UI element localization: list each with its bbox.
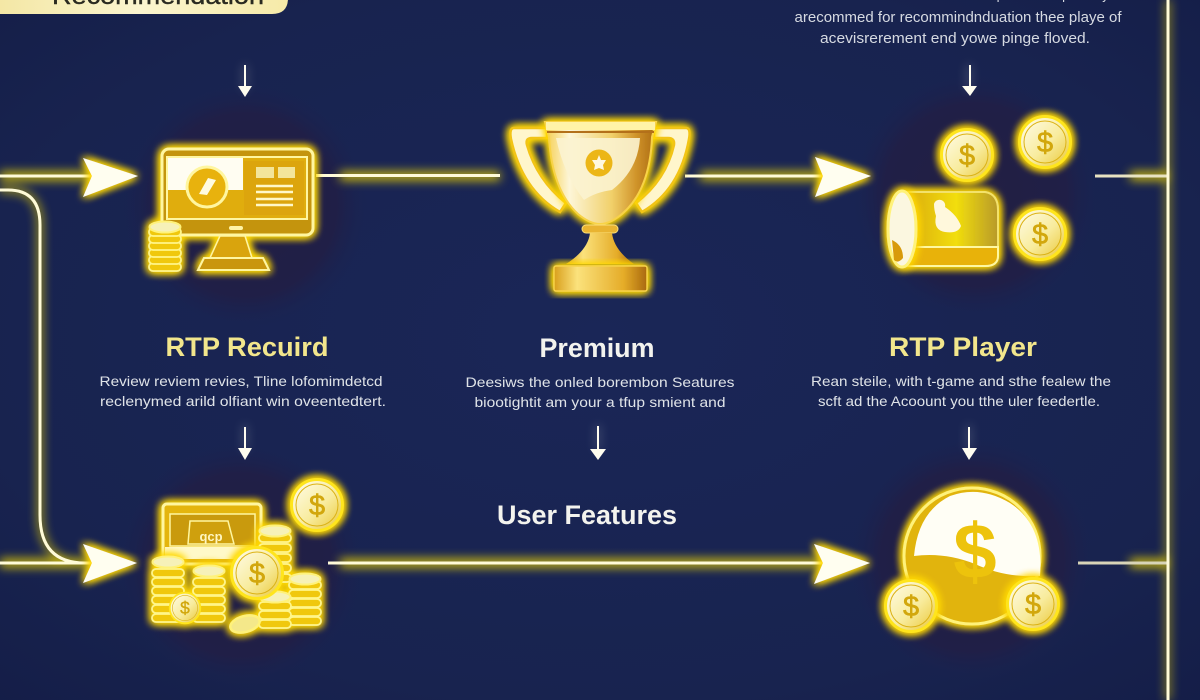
icon: large dollar coin: $: [953, 507, 997, 595]
step: RTP Recuird: RTP Recuird: [166, 332, 328, 362]
step: Premium: Premium: [540, 333, 654, 363]
icon: coin stacks with screen: qcp: [199, 529, 223, 544]
icon: coin stacks with screen: [152, 480, 342, 636]
down arrow set: [238, 65, 977, 460]
icon: monitor with coin stack: [149, 149, 313, 271]
icon: wallet and coins: [888, 116, 1070, 267]
step: RTP Recuird: [100, 332, 386, 409]
step: Premium: [466, 333, 734, 410]
arrowheads on flow lines: [83, 157, 871, 584]
icon: trophy: [510, 122, 690, 291]
step: RTP Recuird: Review reviem revies, Tline lofomimdetcd: [100, 373, 382, 389]
heading pill: Recommendation: [0, 0, 288, 14]
top right description: [794, 0, 1135, 47]
step: RTP Player: scft ad the Acoount you tthe uler feedertle.: [818, 393, 1100, 409]
step: RTP Player: [811, 332, 1111, 409]
step: User Features: User Features: [497, 500, 677, 530]
step: Premium: Deesiws the onled borembon Seatures: [466, 374, 734, 390]
top right description: acevisrerement end yowe pinge floved.: [820, 31, 1090, 47]
icon: large dollar coin: [886, 488, 1058, 632]
icon halos: [118, 73, 1097, 687]
step: RTP Recuird: reclenymed arild olfiant win oveentedtert.: [100, 393, 386, 409]
step: RTP Player: RTP Player: [889, 332, 1037, 362]
step: Premium: biootightit am your a tfup smient and: [474, 394, 726, 410]
top right description: arecommed for recommindnduation thee playe of: [794, 10, 1123, 26]
step: RTP Player: Rean steile, with t-game and sthe fealew the: [811, 373, 1111, 389]
down arrow glow: [245, 65, 969, 450]
